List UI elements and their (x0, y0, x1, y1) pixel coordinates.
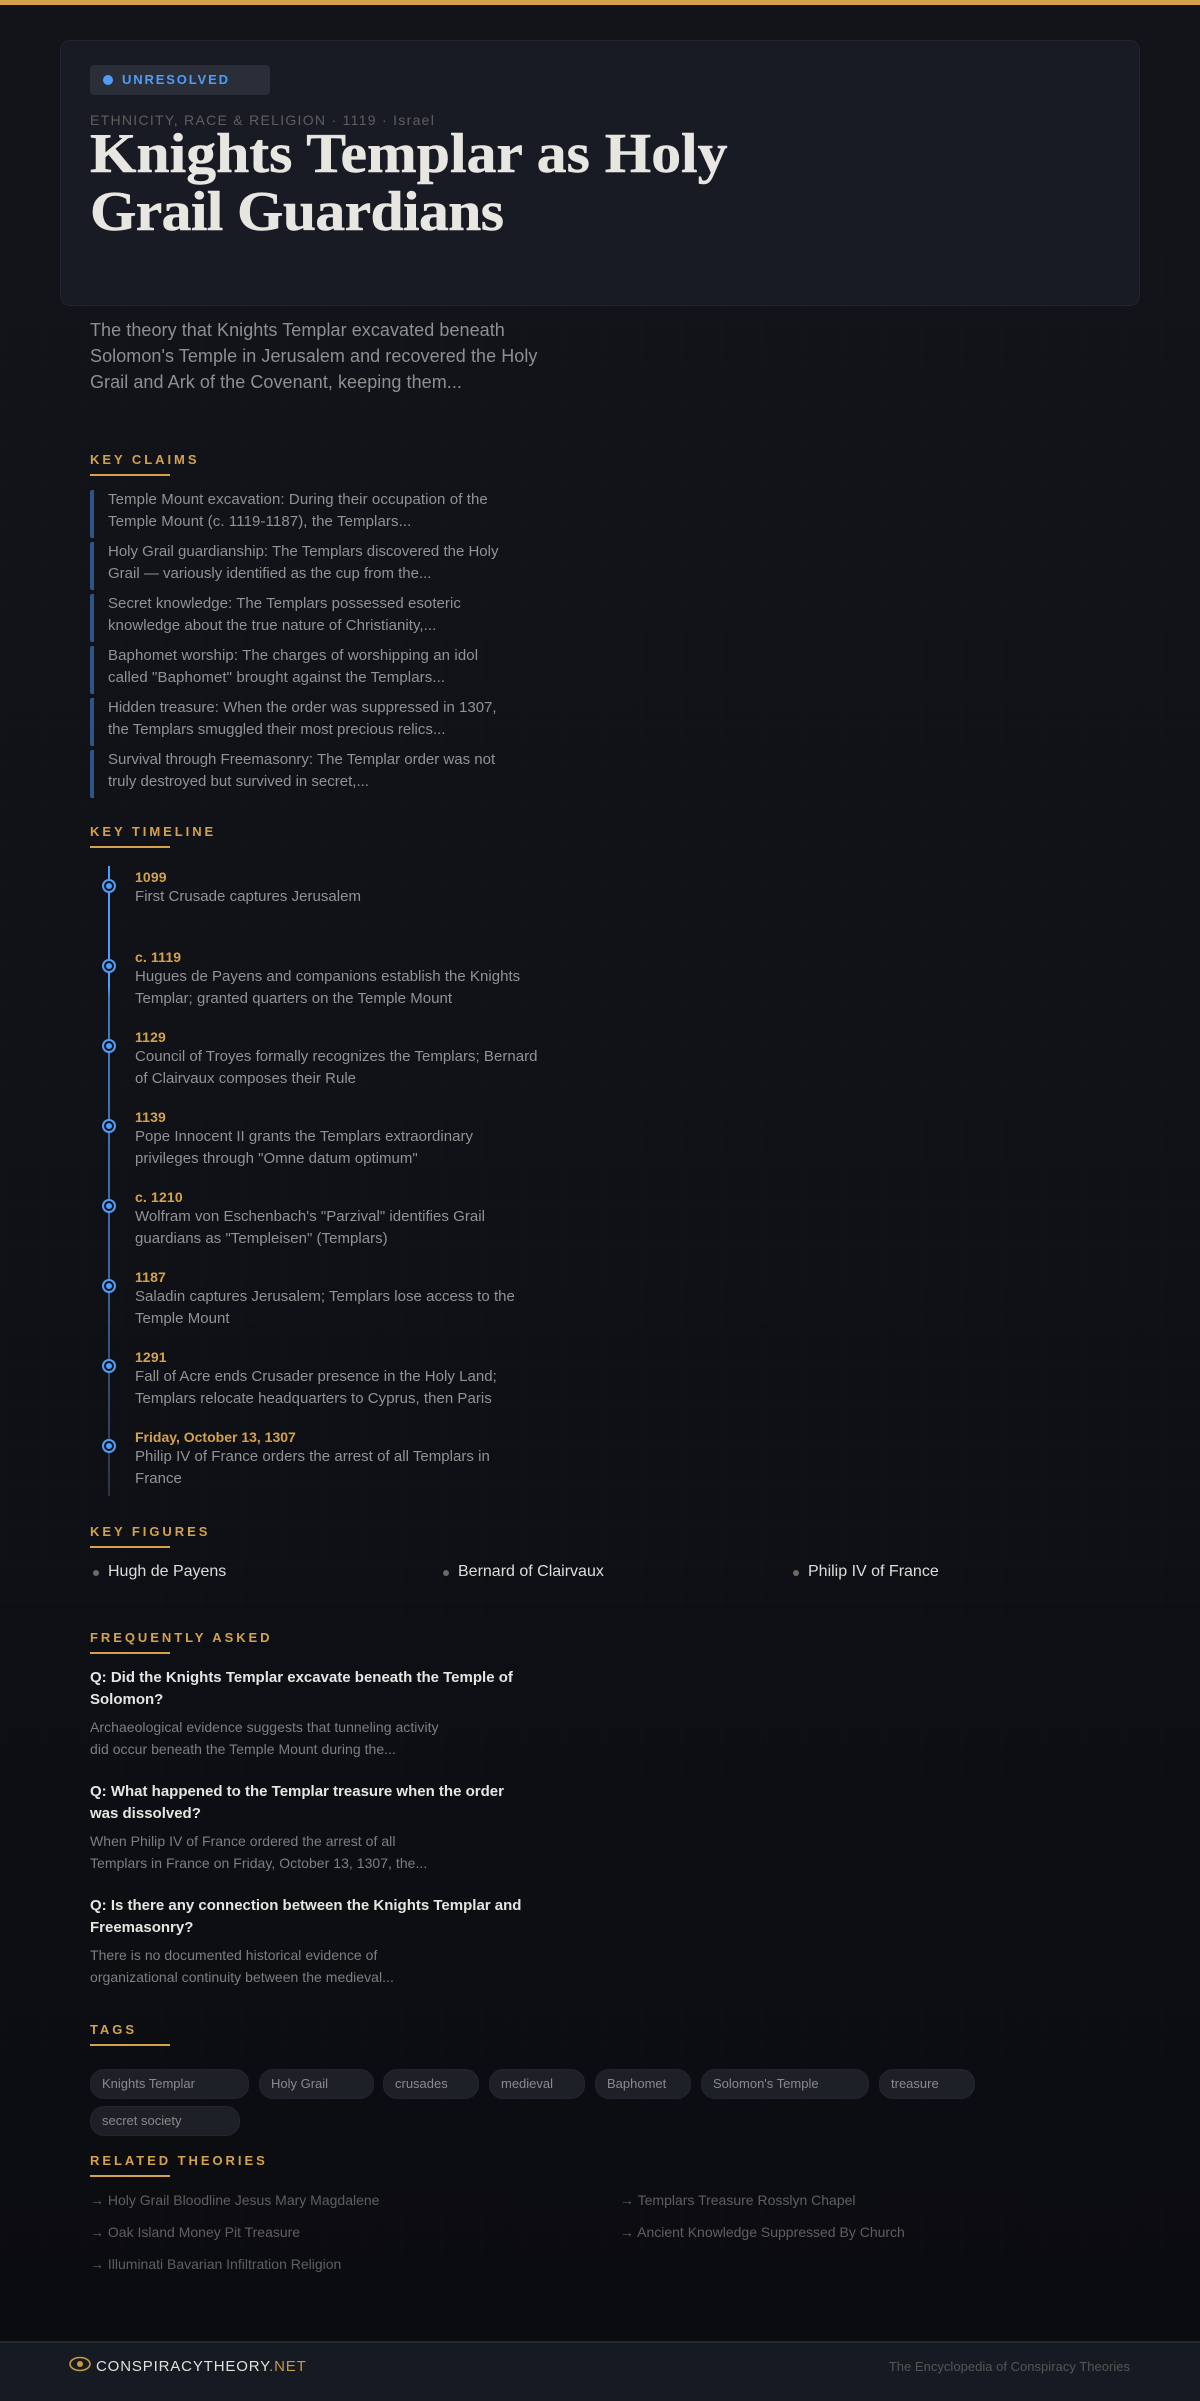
event 1291: Fall of Acre ends Crusader presence in the Holy Land; (135, 1368, 497, 1385)
claim 3: Secret knowledge: The Templars possessed esoteric (108, 595, 461, 612)
related links (90, 2192, 905, 2272)
tag (383, 2069, 479, 2099)
tag (90, 2106, 240, 2136)
footer (0, 2341, 1200, 2401)
timeline marker 4 (102, 1119, 116, 1133)
claim 1 (90, 490, 550, 538)
heading: key figures: KEY FIGURES (90, 1524, 210, 1539)
heading: key timeline: KEY TIMELINE (90, 824, 216, 839)
meta line: ETHNICITY, RACE & RELIGION · 1119 · Israel (90, 112, 435, 128)
event 1187: Saladin captures Jerusalem; Templars lose access to the (135, 1288, 515, 1305)
tag: secret society (102, 2113, 181, 2128)
logo wordmark: CONSPIRACYTHEORY.NET (96, 2358, 307, 2375)
figure: Hugh de Payens: Hugh de Payens (108, 1563, 226, 1580)
faq 1: Solomon? (90, 1691, 163, 1708)
claim 5: Hidden treasure: When the order was suppressed in 1307, (108, 699, 497, 716)
heading: related theories: RELATED THEORIES (90, 2153, 268, 2168)
footer tagline: The Encyclopedia of Conspiracy Theories (889, 2359, 1130, 2374)
tag (879, 2069, 975, 2099)
tag (595, 2069, 691, 2099)
related link: → Oak Island Money Pit Treasure (90, 2224, 300, 2240)
faq 1: Q: Did the Knights Templar excavate beneath the Temple of (90, 1669, 513, 1686)
event 1129: Council of Troyes formally recognizes the Templars; Bernard (135, 1048, 538, 1065)
heading: frequently asked: FREQUENTLY ASKED (90, 1630, 273, 1645)
timeline marker 7 (102, 1359, 116, 1373)
intro text: Solomon's Temple in Jerusalem and recovered the Holy (90, 346, 537, 366)
event c. 1210: c. 1210 (135, 1189, 183, 1205)
tag (701, 2069, 869, 2099)
event 1099 (135, 869, 361, 905)
event c. 1210: guardians as "Templeisen" (Templars) (135, 1230, 388, 1247)
tag list (90, 2069, 975, 2136)
faq 2: was dissolved? (90, 1805, 201, 1822)
timeline marker 3 (102, 1039, 116, 1053)
title: Grail Guardians (90, 181, 503, 243)
event c. 1210: Wolfram von Eschenbach's "Parzival" identifies Grail (135, 1208, 485, 1225)
timeline marker 5 (102, 1199, 116, 1213)
faq 3: There is no documented historical evidence of (90, 1947, 377, 1963)
related link: → Templars Treasure Rosslyn Chapel (620, 2192, 856, 2208)
tag: medieval (501, 2076, 553, 2091)
faq 2 (90, 1783, 504, 1871)
faq 1: did occur beneath the Temple Mount during the... (90, 1741, 396, 1757)
title: Knights Templar as Holy (90, 123, 727, 185)
event 1129: 1129 (135, 1029, 166, 1045)
faq 1: Archaeological evidence suggests that tunneling activity (90, 1719, 439, 1735)
top accent bar (0, 0, 1200, 5)
badge label: UNRESOLVED (122, 72, 230, 87)
faq 3 (90, 1897, 521, 1985)
claim 5: the Templars smuggled their most precious relics... (108, 721, 445, 738)
event c. 1119 (135, 949, 520, 1007)
timeline (108, 866, 110, 1496)
faq 3: organizational continuity between the medieval... (90, 1969, 394, 1985)
claim 1: Temple Mount (c. 1119-1187), the Templars... (108, 513, 411, 530)
event c. 1210 (135, 1189, 485, 1247)
event c. 1119: Templar; granted quarters on the Temple Mount (135, 990, 452, 1007)
event 1291 (135, 1349, 497, 1407)
badge dot (103, 75, 113, 85)
claim 2: Holy Grail guardianship: The Templars discovered the Holy (108, 543, 498, 560)
heading: key claims: KEY CLAIMS (90, 452, 199, 467)
tag: Baphomet (607, 2076, 666, 2091)
claim 6: Survival through Freemasonry: The Templar order was not (108, 751, 495, 768)
heading: tags: TAGS (90, 2022, 137, 2037)
figure: Philip IV of France: Philip IV of France (808, 1563, 939, 1580)
event 1307: Philip IV of France orders the arrest of all Templars in (135, 1448, 490, 1465)
claim 6 (90, 750, 550, 798)
event 1187 (135, 1269, 515, 1327)
faq 2: Templars in France on Friday, October 13, 1307, the... (90, 1855, 427, 1871)
event c. 1119: Hugues de Payens and companions establish the Knights (135, 968, 520, 985)
event 1291: 1291 (135, 1349, 167, 1365)
claim 2 (90, 542, 550, 590)
timeline marker 8 (102, 1439, 116, 1453)
claim 2: Grail — variously identified as the cup from the... (108, 565, 431, 582)
event 1139: 1139 (135, 1109, 166, 1125)
faq 3: Q: Is there any connection between the Knights Templar and (90, 1897, 521, 1914)
faq 2: Q: What happened to the Templar treasure when the order (90, 1783, 504, 1800)
event 1307: Friday, October 13, 1307 (135, 1429, 296, 1445)
event 1291: Templars relocate headquarters to Cyprus, then Paris (135, 1390, 492, 1407)
tag: Solomon's Temple (713, 2076, 819, 2091)
event 1187: Temple Mount (135, 1310, 230, 1327)
event 1307 (135, 1429, 490, 1487)
claim list (90, 490, 498, 798)
event c. 1119: c. 1119 (135, 949, 181, 965)
claim 4 (90, 646, 550, 694)
tag (259, 2069, 374, 2099)
timeline marker 2 (102, 959, 116, 973)
hero card (60, 40, 1140, 306)
tag (489, 2069, 585, 2099)
claim 4: called "Baphomet" brought against the Templars... (108, 669, 445, 686)
event 1139 (135, 1109, 473, 1167)
event 1099: 1099 (135, 869, 167, 885)
claim 1: Temple Mount excavation: During their occupation of the (108, 491, 488, 508)
faq 3: Freemasonry? (90, 1919, 193, 1936)
logo icon: eye (69, 2356, 91, 2372)
event 1307: France (135, 1470, 182, 1487)
event 1139: privileges through "Omne datum optimum" (135, 1150, 418, 1167)
event 1187: 1187 (135, 1269, 166, 1285)
claim 4: Baphomet worship: The charges of worshipping an idol (108, 647, 478, 664)
event 1129 (135, 1029, 538, 1087)
intro text (90, 320, 538, 392)
title (90, 123, 728, 243)
claim 3: knowledge about the true nature of Christianity,... (108, 617, 436, 634)
figure: Bernard of Clairvaux: Bernard of Clairvaux (458, 1563, 604, 1580)
event 1129: of Clairvaux composes their Rule (135, 1070, 356, 1087)
event 1139: Pope Innocent II grants the Templars extraordinary (135, 1128, 473, 1145)
claim 5 (90, 698, 550, 746)
claim 6: truly destroyed but survived in secret,... (108, 773, 369, 790)
status badge: unresolved (90, 65, 270, 95)
timeline marker 6 (102, 1279, 116, 1293)
timeline marker 1 (102, 879, 116, 893)
tag: treasure (891, 2076, 939, 2091)
tag (90, 2069, 249, 2099)
event 1099: First Crusade captures Jerusalem (135, 888, 361, 905)
related link: → Illuminati Bavarian Infiltration Religion (90, 2256, 341, 2272)
tag: crusades (395, 2076, 448, 2091)
tag: Knights Templar (102, 2076, 195, 2091)
related link: → Ancient Knowledge Suppressed By Church (620, 2224, 905, 2240)
intro text: Grail and Ark of the Covenant, keeping them... (90, 372, 462, 392)
faq 2: When Philip IV of France ordered the arrest of all (90, 1833, 395, 1849)
intro text: The theory that Knights Templar excavated beneath (90, 320, 505, 340)
claim 3 (90, 594, 550, 642)
tag: Holy Grail (271, 2076, 328, 2091)
faq 1 (90, 1669, 513, 1757)
timeline axis (108, 866, 110, 1496)
related link: → Holy Grail Bloodline Jesus Mary Magdalene (90, 2192, 379, 2208)
